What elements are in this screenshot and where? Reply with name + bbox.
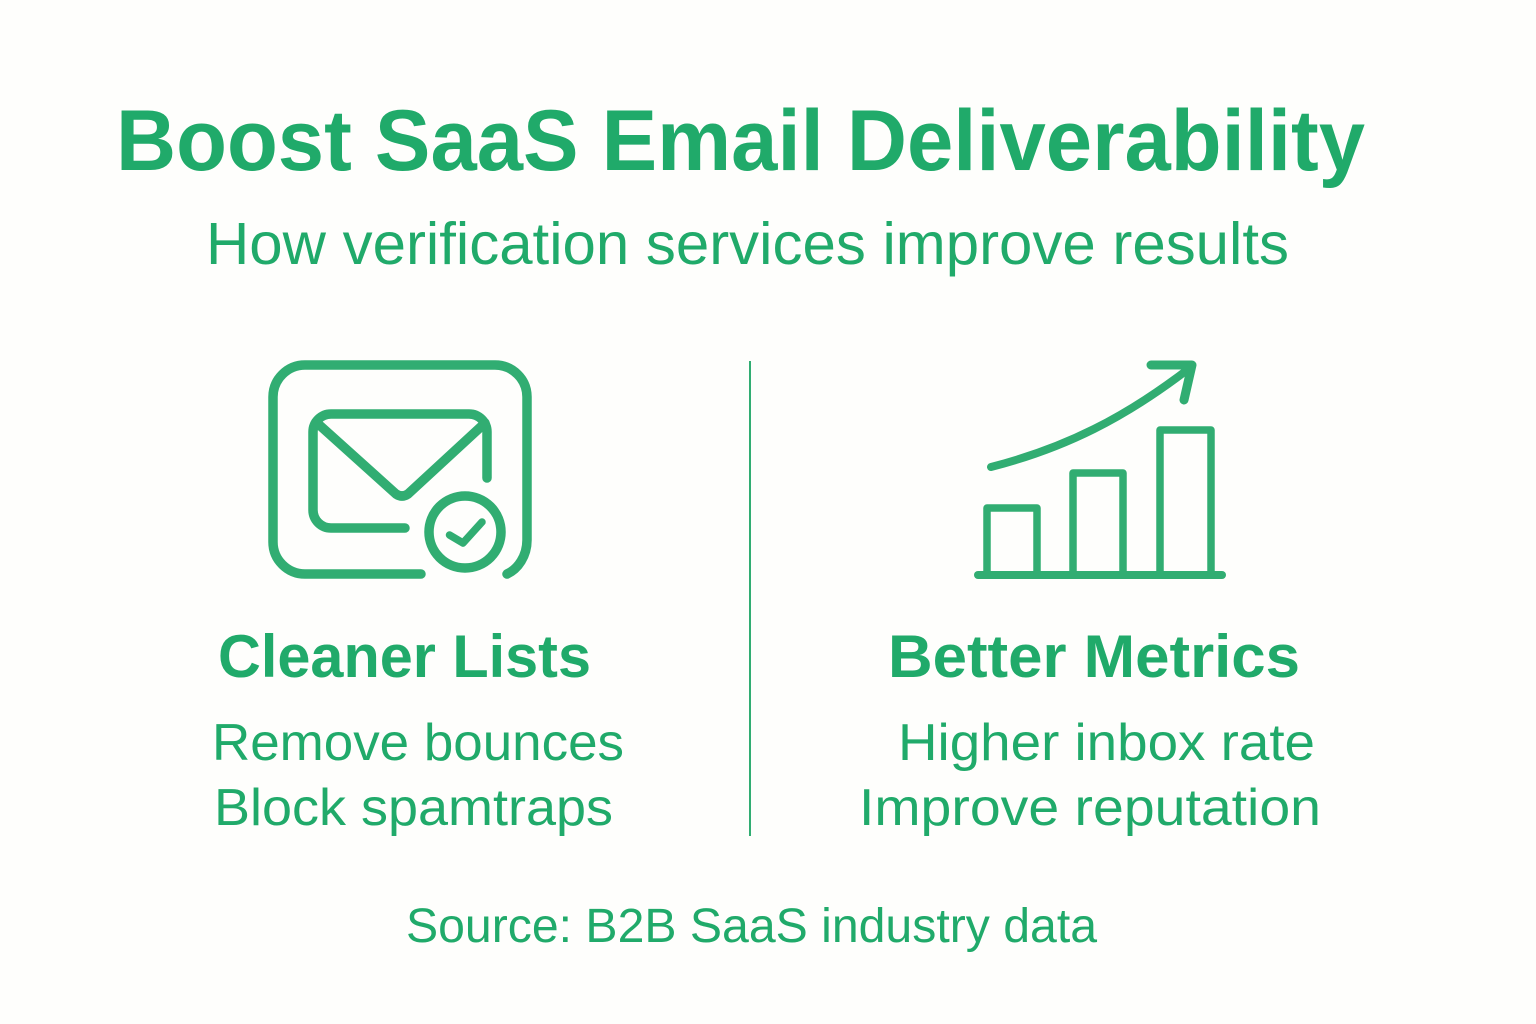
icon: rising bar chart with arrow xyxy=(978,365,1222,575)
heading: cleaner lists: Cleaner Lists xyxy=(218,623,591,690)
heading: better metrics: Better Metrics xyxy=(888,623,1300,690)
benefit: higher inbox rate: Higher inbox rate xyxy=(898,714,1315,772)
panel: cleaner lists xyxy=(212,365,624,837)
benefit: remove bounces: Remove bounces xyxy=(212,714,624,772)
subtitle: How verification services improve results xyxy=(206,211,1289,277)
panel: better metrics xyxy=(859,365,1321,837)
benefit: block spamtraps: Block spamtraps xyxy=(214,779,613,837)
source note: Source: B2B SaaS industry data xyxy=(406,900,1097,953)
benefit: improve reputation: Improve reputation xyxy=(859,779,1321,837)
icon: envelope with check badge xyxy=(273,365,527,574)
title: Boost SaaS Email Deliverability xyxy=(116,93,1365,189)
